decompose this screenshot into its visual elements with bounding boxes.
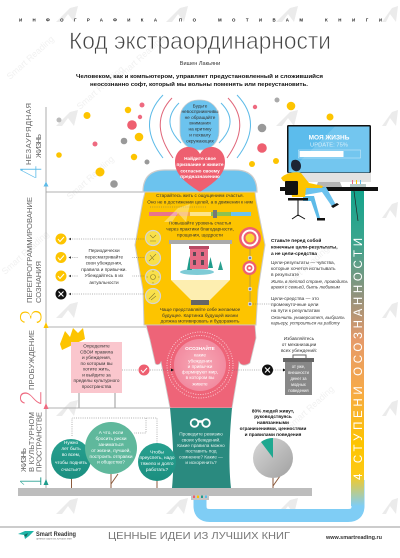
stage 1 label: ЖИЗНЬ bbox=[19, 448, 28, 472]
tree 1: счастье? bbox=[61, 467, 81, 472]
check icons bbox=[56, 234, 66, 300]
trash can: внешности bbox=[288, 370, 309, 375]
awareness text: и привычки bbox=[188, 364, 213, 369]
four steps column: 4 СТУПЕНИ ОСОЗНАННОСТИ bbox=[353, 238, 365, 480]
visualisation text bbox=[160, 306, 241, 324]
goals text: в результате bbox=[271, 273, 299, 278]
top label: МОТИВАМ bbox=[218, 18, 303, 22]
head text: Будьте bbox=[193, 104, 208, 108]
statistic text: ограничениями, ценностями bbox=[240, 426, 306, 431]
goals text: на пути к результатам bbox=[271, 309, 320, 314]
own rules board: СВОИ правила bbox=[80, 350, 113, 354]
top label: ПО bbox=[179, 18, 197, 22]
tree 1 bbox=[51, 439, 91, 488]
stage 1 label: 1 bbox=[13, 476, 49, 487]
subtitle: Человеком, как и компьютером, управляет предустановленный и сложившийся bbox=[76, 73, 323, 80]
trash can: от уже, bbox=[292, 364, 305, 369]
statistic text bbox=[240, 408, 306, 437]
tree 1: во всем, bbox=[62, 452, 80, 457]
review beliefs text bbox=[78, 246, 132, 286]
author: Вишен Лакьяни bbox=[180, 61, 220, 67]
discard text: Избавляйтесь bbox=[284, 335, 315, 341]
revision text: сомнение? Какие — bbox=[179, 454, 223, 460]
top label: ИНФОГРАФИКА bbox=[19, 18, 158, 22]
person at desk bbox=[281, 160, 339, 220]
axis arrows bbox=[44, 182, 48, 485]
head text: невосприимчивы bbox=[181, 109, 219, 114]
goals text bbox=[270, 237, 349, 326]
tree 3: преуспеть, надо bbox=[139, 455, 175, 460]
head text: не обращайте bbox=[185, 114, 216, 120]
stage 1 label: ПРОСТРАНСТВЕ bbox=[34, 412, 44, 472]
website: www.smartreading.ru bbox=[325, 535, 382, 541]
logo: ценные идеи из лучших книг bbox=[36, 538, 72, 540]
goals text: карьеру, устроиться на работу bbox=[271, 320, 340, 326]
yellow practice icons bbox=[146, 230, 160, 304]
visualisation text: будущее. Картинка будущей жизни bbox=[162, 312, 238, 318]
signal arcs around head bbox=[150, 95, 250, 158]
watermark pattern: Smart Reading bbox=[65, 154, 116, 201]
revision text: поставить под bbox=[186, 448, 217, 454]
tree 1: лет быть bbox=[61, 446, 81, 451]
heart text: согласно своему bbox=[180, 168, 220, 174]
tree 3: Чтобы bbox=[150, 450, 165, 454]
statistic text: навязанными bbox=[257, 420, 289, 425]
target chain bbox=[239, 227, 271, 306]
goals text: промежуточные цели bbox=[271, 303, 319, 308]
trash can: поведения bbox=[288, 388, 309, 393]
heart text: предназначению bbox=[180, 174, 220, 179]
own rules board: пределы культурного bbox=[74, 378, 120, 383]
statistic text: и правилами поведения bbox=[245, 432, 302, 437]
goals text: Окончить университет, выбрать bbox=[271, 315, 345, 320]
happiness text: Старайтесь жить с ощущением счастья. bbox=[156, 192, 244, 198]
statistic text: руководствуясь bbox=[254, 414, 292, 419]
tree 2 bbox=[85, 422, 137, 488]
review beliefs text: свои убеждения, bbox=[86, 260, 122, 266]
own rules board: и убеждения, bbox=[82, 355, 111, 360]
own rules board: и выйдите за bbox=[82, 372, 111, 378]
discard text: всех убеждений: bbox=[281, 347, 317, 353]
body: teal legs bbox=[170, 408, 232, 488]
gratitude text bbox=[166, 220, 234, 238]
discard text: от механизации bbox=[282, 342, 317, 347]
goals text: а не цели-средства bbox=[271, 252, 317, 257]
awareness text: убеждения bbox=[188, 358, 212, 364]
watermark pattern: Smart Reading bbox=[285, 384, 336, 431]
gratitude text: прощения, щедрости bbox=[177, 232, 223, 238]
review beliefs text: Убеждайтесь в их bbox=[85, 272, 124, 278]
revision text: Какие правила можно bbox=[177, 443, 225, 448]
tree 2: построить отправки bbox=[90, 454, 133, 459]
trash can bbox=[283, 355, 314, 395]
pie tree chart bbox=[253, 438, 293, 488]
head text: окружающих bbox=[186, 138, 214, 144]
tree 2: бросить риски bbox=[96, 436, 127, 441]
top label bbox=[19, 18, 382, 22]
scattered emotion dots bbox=[56, 98, 333, 188]
watermark pattern: Smart Reading bbox=[75, 64, 126, 111]
top label: КНИГИ bbox=[325, 18, 382, 22]
happiness text bbox=[147, 192, 253, 204]
tree 3: работать? bbox=[146, 467, 168, 472]
review beliefs text: правила и привычки. bbox=[81, 267, 127, 272]
body: head bbox=[180, 100, 219, 150]
crown bbox=[60, 328, 85, 350]
revision text: своих убеждений. bbox=[182, 436, 220, 442]
watermark pattern: Smart Reading bbox=[280, 244, 331, 291]
stage 3 label: 3 bbox=[13, 309, 49, 325]
happiness slider bbox=[149, 207, 251, 218]
body: shoulders bbox=[143, 170, 257, 192]
monitor: МОЯ ЖИЗНЬ bbox=[309, 134, 350, 142]
pink check connector bbox=[122, 364, 174, 376]
watermark pattern: Smart Reading bbox=[115, 34, 166, 81]
monitor bbox=[287, 125, 371, 187]
stage 3 label: СОЗНАНИЯ bbox=[34, 261, 43, 303]
own rules board: пространства bbox=[82, 384, 112, 389]
subtitle bbox=[76, 73, 323, 88]
awareness text: в котором вы bbox=[186, 375, 215, 380]
goals text: Цели-средства — это bbox=[271, 296, 319, 302]
ground bbox=[18, 488, 312, 496]
tree 2: А что, если bbox=[99, 430, 124, 435]
awareness text: какие bbox=[194, 352, 206, 358]
stage 2 label bbox=[13, 330, 49, 406]
footer rule bbox=[0, 526, 400, 528]
path connector bbox=[191, 495, 209, 500]
awareness text: живете bbox=[192, 382, 208, 386]
goals text: конечные цели-результаты, bbox=[271, 246, 338, 250]
tree 2: от жизни, лучшей, bbox=[91, 447, 131, 453]
visualisation text: Чаще представляйте себе желаемое bbox=[160, 306, 241, 312]
monitor: UPDATE: 75% bbox=[310, 142, 348, 148]
title: Код экстраординарности bbox=[69, 28, 331, 55]
trash can: модных bbox=[291, 382, 306, 387]
tree 3: тяжело и долго bbox=[140, 461, 174, 466]
desk bbox=[280, 180, 378, 221]
heart text: призвание и живите bbox=[176, 162, 224, 167]
gratitude text: Повышайте уровень счастья bbox=[169, 220, 232, 226]
tree 2: и общество? bbox=[97, 460, 125, 464]
discard text bbox=[281, 335, 317, 353]
awareness text bbox=[182, 344, 218, 386]
tree 2: заниматься bbox=[98, 442, 124, 447]
head text bbox=[181, 104, 219, 144]
tree 1: чтобы поднять bbox=[55, 460, 88, 465]
stage 4 label bbox=[13, 103, 49, 179]
body: yellow torso bbox=[135, 192, 265, 325]
heart text bbox=[176, 155, 224, 179]
icon: binoculars bbox=[191, 419, 210, 427]
watermark pattern: Smart Reading bbox=[5, 34, 56, 81]
stage 1 label bbox=[13, 412, 49, 487]
stage 4 label: ЖИЗНЬ bbox=[34, 134, 43, 158]
own rules board bbox=[71, 342, 122, 408]
black cross connector bbox=[232, 364, 286, 376]
review beliefs text: пересматривайте bbox=[85, 254, 123, 260]
head text: внимания bbox=[189, 120, 211, 126]
head text: и похвалу bbox=[189, 132, 211, 138]
goals text: Жить в теплой стране, проводить bbox=[270, 278, 349, 284]
watermark pattern: Smart Reading bbox=[0, 229, 51, 276]
goals text: Цели-результаты — чувства, bbox=[271, 260, 335, 266]
logo bbox=[18, 531, 76, 540]
review beliefs text: Периодически bbox=[88, 248, 120, 253]
stage 3 label: ПЕРЕПРОГРАММИРОВАНИЕ bbox=[25, 197, 34, 303]
own rules board: хотите жить, bbox=[83, 366, 110, 372]
own rules board: по которым вы bbox=[80, 361, 113, 366]
tree 1: Нужно bbox=[64, 440, 78, 445]
goals text: которые хочется испытывать bbox=[271, 267, 336, 272]
trash can: денег за bbox=[290, 376, 307, 381]
revision text: Проведите ревизию bbox=[179, 432, 223, 436]
goals text: Ставьте перед собой bbox=[271, 237, 321, 244]
head text: на критику bbox=[188, 126, 212, 132]
awareness text: формируют мир, bbox=[182, 370, 218, 374]
awareness circle bbox=[167, 332, 233, 398]
left review connectors bbox=[68, 238, 145, 295]
statistic text: 80% людей живут, bbox=[252, 408, 294, 414]
tree 3 bbox=[138, 443, 176, 488]
revision text: и искоренить? bbox=[185, 460, 217, 465]
gratitude text: через практики благодарности, bbox=[166, 226, 234, 232]
stage 2 label: ПРОБУЖДЕНИЕ bbox=[27, 330, 36, 390]
axis and stage lines bbox=[46, 107, 170, 488]
subtitle: неосознанно софт, который мы вольны поменять или переустановить. bbox=[90, 81, 308, 88]
stage 2 label: 2 bbox=[13, 390, 49, 406]
review beliefs text: актуальности bbox=[89, 280, 119, 285]
logo: Smart Reading bbox=[36, 531, 76, 538]
revision text bbox=[177, 432, 225, 465]
goals text: время с семьей, быть любимым bbox=[271, 284, 340, 290]
slogan: ЦЕННЫЕ ИДЕИ ИЗ ЛУЧШИХ КНИГ bbox=[108, 530, 290, 542]
four steps column bbox=[351, 191, 365, 506]
projector screen with house bbox=[169, 240, 232, 305]
stage 4 label: 4 bbox=[13, 165, 49, 179]
own rules board: Определите bbox=[83, 344, 110, 348]
body: pink torso bbox=[146, 325, 256, 408]
heart bbox=[175, 147, 225, 192]
stage 3 label bbox=[13, 197, 49, 325]
overlay watermark on torso bbox=[164, 204, 190, 222]
stage 4 label: НЕЗАУРЯДНАЯ bbox=[24, 103, 33, 165]
tree connectors bbox=[72, 418, 157, 443]
visualisation text: должна мотивировать и будоражить bbox=[161, 318, 240, 324]
blue path bbox=[200, 480, 358, 516]
stage 1 label: В КУЛЬТУРНОМ bbox=[27, 412, 36, 472]
happiness text: Оно не в достижении целей, а в движении к ним bbox=[147, 198, 253, 204]
awareness text: ОСОЗНАЙТЕ bbox=[185, 344, 215, 351]
heart text: Найдите свое bbox=[184, 155, 216, 161]
